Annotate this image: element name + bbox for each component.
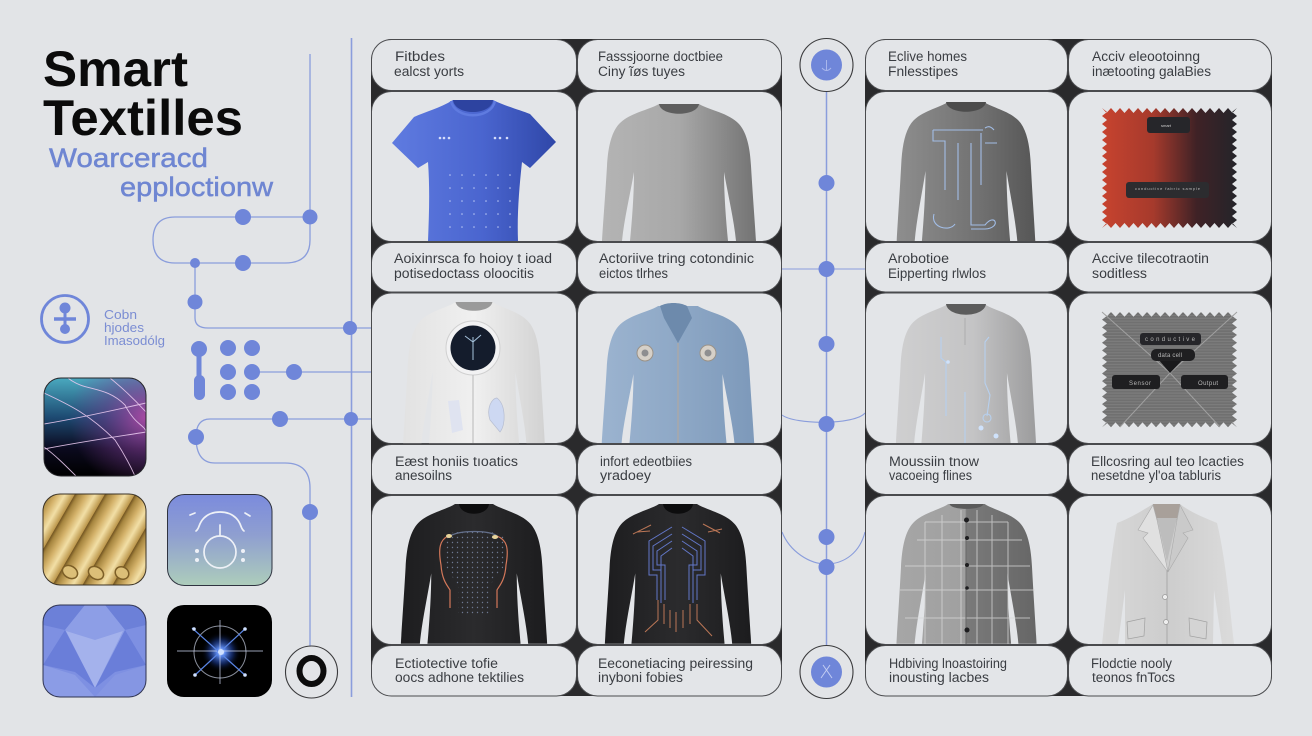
caption text: left table: eictos tlrhes (599, 266, 668, 281)
caption text: right table: Moussiin tnow (889, 454, 979, 469)
panel: left table (371, 39, 782, 696)
caption text: right table: Eclive homes (888, 49, 967, 64)
caption text: left table: oocs adhone tektilies (395, 670, 524, 685)
caption text: left table: ealcst yorts (394, 64, 464, 79)
caption text: right table: inousting lacbes (889, 670, 989, 685)
caption text: right table: vacoeing flines (889, 468, 972, 483)
title: Textilles (43, 90, 243, 146)
caption text: right table: Hdbiving lnoastoiring (889, 656, 1007, 671)
caption text: left table: inyboni fobies (598, 670, 683, 685)
thumbnail: gold conductive tubes (43, 494, 146, 585)
garment: grey top with circuit lines (897, 102, 1035, 241)
caption text: left table: infort edeotbiies (600, 454, 692, 469)
fabric swatch: red to black (1102, 108, 1237, 228)
garment: blue jacket with discs (602, 303, 754, 443)
connector network: centre (782, 92, 865, 646)
caption text: left table: Eeconetiacing peiressing (598, 656, 753, 671)
caption text: left table (394, 49, 754, 685)
subtitle: epploctionw (120, 172, 274, 202)
caption text: right table: Ellcosring aul teo lcacties (1091, 454, 1244, 469)
thumbnail: blue facets (43, 605, 146, 697)
icon: top node (800, 38, 853, 92)
caption text: left table: Fasssjoorne doctbiee (598, 49, 723, 64)
fabric swatch: grey with labels: conductive (1145, 337, 1196, 343)
garment: black circuit top (605, 504, 751, 644)
connector network: left (153, 38, 372, 697)
subtitle: Woarceracd (49, 143, 208, 173)
caption text: right table (888, 49, 1244, 685)
garment: plaid shirt (896, 504, 1037, 644)
caption text: left table: Eæst honiis tıoatics (395, 454, 518, 469)
caption text: right table: Fnlesstipes (888, 64, 958, 79)
fabric swatch: grey with labels: Sensor (1129, 381, 1151, 387)
icon label: Cobn (104, 308, 137, 322)
caption text: right table: Arobotioe (888, 251, 949, 266)
caption text: left table: Actoriive tring cotondinic (599, 251, 754, 266)
caption text: right table: Acciv eleootoinng (1092, 49, 1200, 64)
panel: right table (865, 39, 1272, 696)
garment: pale top with fine lines (896, 304, 1036, 443)
caption text: left table: Aoixinrsca fo hoioy t ioad (394, 251, 552, 266)
title (43, 41, 243, 146)
icon label: Imasodólg (104, 334, 165, 348)
garment: grey long sleeve (602, 104, 756, 241)
thumbnail: neon fibres (44, 378, 146, 476)
caption text: right table: Eipperting rlwlos (888, 266, 986, 281)
fabric swatch: grey with labels: data cell (1158, 353, 1182, 359)
thumbnail outline: blue facets (43, 605, 146, 697)
garment: black heating top (401, 504, 547, 644)
icon label (104, 308, 165, 348)
fabric swatch: grey with labels: Output (1198, 381, 1218, 387)
icon: black ring control (286, 646, 338, 698)
subtitle (49, 143, 274, 202)
caption text: left table: Ectiotective tofie (395, 656, 498, 671)
thumbnail outline: neon fibres (44, 378, 146, 476)
icon: round textile symbol (42, 296, 88, 342)
caption text: right table: nesetdne yl'oa tabluris (1091, 468, 1221, 483)
caption text: right table: soditless (1092, 266, 1147, 281)
caption text: left table: Fitbdes (395, 49, 445, 64)
thumbnail: dial sensor icon (168, 494, 272, 586)
caption text: right table: Flodctie nooly (1091, 656, 1172, 671)
thumbnail: star sensor (167, 605, 272, 697)
caption text: left table: anesoilns (395, 468, 452, 483)
caption text: left table: potisedoctass oloocitis (394, 266, 534, 281)
caption text: right table: teonos fnTocs (1092, 670, 1175, 685)
icon label: hjodes (104, 321, 144, 335)
caption text: right table: inætooting galaBies (1092, 64, 1211, 79)
fabric swatch: red to black: smart (1161, 123, 1172, 128)
caption text: right table: Accive tilecotraotin (1092, 251, 1209, 266)
garment: blue sensor t-shirt (392, 100, 556, 241)
garment: white blazer (1102, 504, 1234, 644)
thumbnail outline: gold tubes (43, 494, 146, 585)
garment: white shirt with display (403, 302, 545, 443)
fabric swatch: grey with labels (1102, 312, 1237, 427)
caption text: left table: yradoey (600, 468, 651, 483)
icon: bottom node (800, 646, 853, 698)
caption text: left table: Ciny ĩøs tuyes (598, 64, 685, 79)
title: Smart (43, 41, 188, 97)
fabric swatch: red to black: conductive fabric sample (1135, 186, 1201, 191)
